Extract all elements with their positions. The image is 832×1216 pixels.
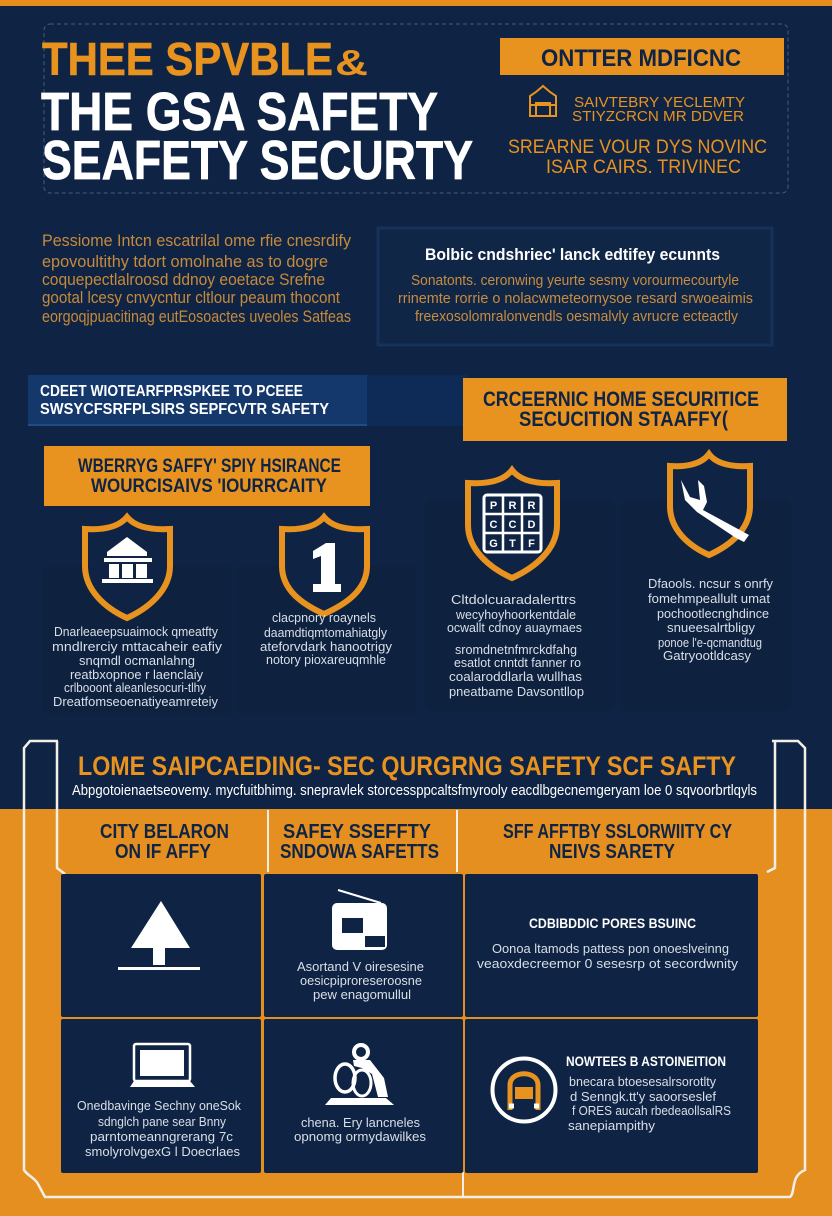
callout heading [500, 38, 784, 75]
callout text: STIYZCRCN MR DDVER [572, 108, 744, 125]
callout text: SREARNE VOUR DYS NOVINC [508, 137, 767, 158]
blue banner: CDEET WIOTEARFPRSPKEE TO PCEEE [40, 383, 303, 400]
column text 3 [447, 592, 584, 699]
column text 1 [52, 624, 223, 709]
icon: shield with keypad: F [528, 538, 535, 550]
column text 1: Dnarleaeepsuaimock qmeatfty [54, 624, 218, 639]
laptop text: sdnglch pane sear Bnny [98, 1114, 226, 1129]
column text 4 [648, 576, 773, 663]
laptop text: smolyrolvgexG l Doecrlaes [85, 1144, 240, 1159]
panel: key safety elements: freexosolomralonvendls oesmalvly avrucre ecteactly [415, 309, 739, 325]
column text 2: daamdtiqmtomahiatgly [264, 625, 387, 640]
column text 1: crlbooont aleanlesocuri-tlhy [64, 680, 206, 695]
people text: opnomg ormydawilkes [294, 1129, 426, 1144]
panel: automation [465, 1019, 758, 1173]
callout text [508, 94, 767, 178]
callout text: SAIVTEBRY YECLEMTY [574, 94, 745, 111]
header panel [41, 24, 788, 193]
column panels [42, 500, 792, 715]
title: THE GSA SAFETY [41, 82, 438, 142]
intro text: epovoultithy tdort omolnahe as to dogre [42, 252, 328, 271]
top accent strip [0, 0, 832, 6]
orange banner: right: CRCEERNIC HOME SECURITICE [483, 388, 759, 411]
people text [294, 1115, 426, 1144]
column heading 3 [503, 821, 733, 863]
icon: shield with keypad: P [490, 500, 497, 512]
radio text [297, 959, 424, 1002]
column text 1: reatbxopnoe r laenclaiy [70, 667, 203, 682]
automation text: NOWTEES B ASTOINEITION [566, 1054, 726, 1069]
column heading 1 [100, 821, 229, 863]
icon: building lock [530, 86, 556, 116]
automation text: bnecara btoesesalrsorotlty [569, 1074, 716, 1089]
intro text: Pessiome Intcn escatrilal ome rfie cnesrdify [42, 231, 351, 250]
white frame [24, 741, 805, 1197]
blue banner: SWSYCFSRFPLSIRS SEPFCVTR SAFETY [40, 401, 329, 418]
laptop text: parntomeanngrerang 7c [90, 1129, 234, 1144]
column text 3: wecyhoyhoorkentdale [455, 607, 576, 622]
column text 1: snqmdl ocmanlahng [79, 653, 195, 668]
column text 1: mndlrerciy mttacaheir eafiy [52, 639, 223, 654]
panel: key safety elements: Sonatonts. ceronwing yeurte sesmy vorourmecourtyle [411, 273, 739, 289]
column text 4: pochootlecnghdince [657, 606, 769, 621]
automation text [566, 1054, 731, 1133]
panel: key safety elements: rrinemte rorrie o nolacwmeteornysoe resard srwoeaimis [398, 291, 753, 307]
column text 3: coalaroddlarla wullhas [449, 669, 583, 684]
column text 3: ocwallt cdnoy auaymaes [447, 620, 582, 635]
column text 3: Cltdolcuaradalerttrs [451, 592, 577, 607]
column heading 2: SNDOWA SAFETTS [280, 841, 439, 863]
icon: shield with keypad: C [509, 519, 517, 531]
panel: notes: CDBIBDDIC PORES BSUINC [529, 916, 696, 931]
panel: notes: veaoxdecreemor 0 sesesrp ot secordwnity [477, 956, 739, 971]
title: & [335, 42, 368, 83]
column text 4: snueesalrtbligy [667, 620, 756, 635]
icon: people [325, 1045, 394, 1105]
intro text: gootal lcesy cnvycntur cltlour peaum thocont [42, 288, 340, 307]
icon: shield with keypad: R [509, 500, 517, 512]
column text 2: clacpnory roaynels [272, 610, 376, 625]
callout heading: ONTTER MDFICNC [541, 45, 741, 72]
column text 2: notory pioxareuqmhle [266, 652, 386, 667]
section heading [58, 740, 772, 809]
intro text: coquepectlalroosd ddnoy eoetace Srefne [42, 270, 325, 289]
column heading 3: NEIVS SARETY [549, 841, 676, 863]
title: SEAFETY SECURTY [42, 129, 473, 191]
column text 4: ponoe l'e-qcmandtug [658, 635, 762, 650]
column heading 2 [280, 821, 439, 863]
orange banner: left [44, 446, 370, 506]
column text 4: Gatryootldcasy [663, 648, 752, 663]
column text 3: pneatbame Davsontllop [449, 684, 584, 699]
section heading: LOME SAIPCAEDING- SEC QURGRNG SAFETY SCF SAFTY [78, 751, 736, 781]
orange lower background [0, 809, 832, 1216]
column text 2: ateforvdark hanootrigy [260, 639, 393, 654]
panel: notes [465, 874, 758, 1017]
radio text: pew enagomullul [313, 987, 411, 1002]
laptop text: Onedbavinge Sechny oneSok [77, 1098, 241, 1113]
automation text: sanepiampithy [568, 1118, 656, 1133]
orange banner: right [463, 378, 787, 441]
orange banner: left: WBERRYG SAFFY' SPIY HSIRANCE [78, 456, 341, 477]
panel: people [264, 1019, 463, 1173]
title: THEE SPVBLE [42, 33, 333, 85]
icon: shield with keypad: D [528, 519, 536, 531]
column heading 2: SAFEY SSEFFTY [283, 821, 432, 843]
column text 1: Dreatfomseoenatiyeamreteiy [53, 694, 218, 709]
panel: radio [264, 874, 463, 1017]
icon: shield with keypad: R [528, 500, 536, 512]
column text 4: fomehmpeallult umat [648, 591, 770, 606]
intro text: eorgoqjpuacitinag eutEosoactes uveoles Satfeas [42, 307, 351, 326]
radio text: Asortand V oiresesine [297, 959, 424, 974]
icon: tree [118, 901, 200, 970]
icon: shield with keypad: C [490, 519, 498, 531]
column text 4: Dfaools. ncsur s onrfy [648, 576, 773, 591]
orange banner: left: WOURCISAIVS 'IOURRCAITY [91, 476, 327, 497]
callout text: ISAR CAIRS. TRIVINEC [546, 157, 741, 178]
title [41, 33, 473, 191]
orange banner: right: SECUCITION STAAFFY( [519, 408, 728, 431]
automation text: d Senngk.tt'y saoorseslef [570, 1089, 716, 1104]
column heading 1: CITY BELARON [100, 821, 229, 843]
icon: shield with number one [282, 517, 367, 614]
blue banner [28, 375, 467, 426]
icon: round badge [492, 1058, 556, 1122]
people text: chena. Ery lancneles [301, 1115, 420, 1130]
panel: tree [61, 874, 261, 1017]
icon: shield with bank [85, 517, 170, 618]
panel: notes: Oonoa ltamods pattess pon onoeslveinng [492, 941, 729, 956]
icon: shield with keypad: T [509, 538, 516, 550]
icon: shield with keypad: G [489, 538, 498, 550]
panel: laptop [61, 1019, 261, 1173]
radio text: oesicpiproreseroosne [300, 973, 422, 988]
icon: radio [332, 890, 387, 950]
icon: shield with wrench [670, 454, 750, 555]
column text 3: esatlot cnntdt fanner ro [454, 655, 581, 670]
automation text: f ORES aucah rbedeaollsalRS [572, 1103, 731, 1118]
intro text [42, 231, 351, 326]
column text 2 [260, 610, 393, 667]
section heading: Abpgotoienaetseovemy. mycfuitbhimg. snepravlek storcessppcaltsfmyrooly eacdlbgecnemgeryam loe 0 sqvoorbrtlqyls [72, 783, 757, 799]
laptop text [77, 1098, 241, 1159]
column text 3: sromdnetnfmrckdfahg [455, 642, 577, 657]
icon: laptop [130, 1044, 195, 1087]
panel: key safety elements: Bolbic cndshriec' lanck edtifey ecunnts [425, 245, 720, 264]
column heading 1: ON IF AFFY [115, 841, 212, 863]
column heading 3: SFF AFFTBY SSLORWIITY CY [503, 821, 733, 843]
icon: shield with keypad [468, 470, 557, 578]
panel: key safety elements [378, 228, 772, 345]
